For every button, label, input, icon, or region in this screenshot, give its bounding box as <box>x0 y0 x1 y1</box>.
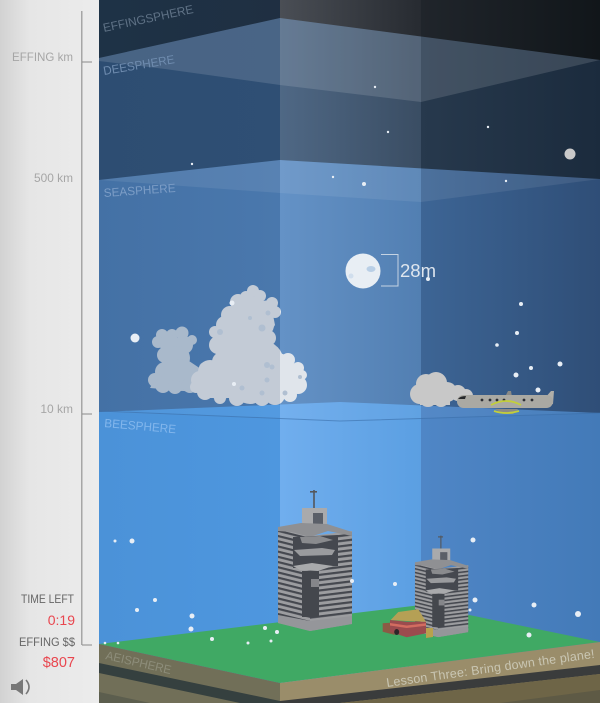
barn <box>383 609 433 638</box>
plane smoke trail <box>410 372 473 407</box>
layer label: DEESPHERE: DEESPHERE <box>102 52 176 78</box>
large building <box>278 490 352 631</box>
moon / falling meteor <box>346 254 380 288</box>
scale label: 500 km: 500 km <box>34 171 73 185</box>
icon: sound speaker <box>11 679 29 695</box>
scale label: 10 km: 10 km <box>40 402 73 416</box>
airplane <box>457 391 554 414</box>
large cloud <box>190 285 307 406</box>
ground: right soil face <box>280 642 600 703</box>
layer label: BEESPHERE: BEESPHERE <box>104 416 177 436</box>
size bracket <box>381 254 398 286</box>
sidebar background <box>0 0 99 703</box>
plane: beesphere boundary <box>99 402 600 421</box>
snow particles and debris <box>104 86 581 645</box>
small building <box>415 536 468 637</box>
time left value: 0:19 <box>48 612 75 628</box>
scale label: EFFING km: EFFING km <box>12 50 73 64</box>
size label: 28m <box>400 260 436 281</box>
small cloud <box>148 326 211 394</box>
money value: $807 <box>43 655 75 671</box>
time left label: TIME LEFT <box>21 592 75 606</box>
ground: left soil face <box>99 644 280 703</box>
layer label: AEISPHERE: AEISPHERE <box>104 648 173 677</box>
plane: seasphere boundary <box>99 160 600 202</box>
layer label: EFFINGSPHERE: EFFINGSPHERE <box>102 2 195 35</box>
money label: EFFING $$ <box>19 635 75 649</box>
ground: green surface <box>99 605 600 683</box>
altitude scale <box>81 11 92 646</box>
plane: deesphere boundary <box>99 18 600 102</box>
layer label: SEASPHERE: SEASPHERE <box>103 181 176 200</box>
lesson caption: Lesson Three: Bring down the plane! <box>385 647 595 690</box>
